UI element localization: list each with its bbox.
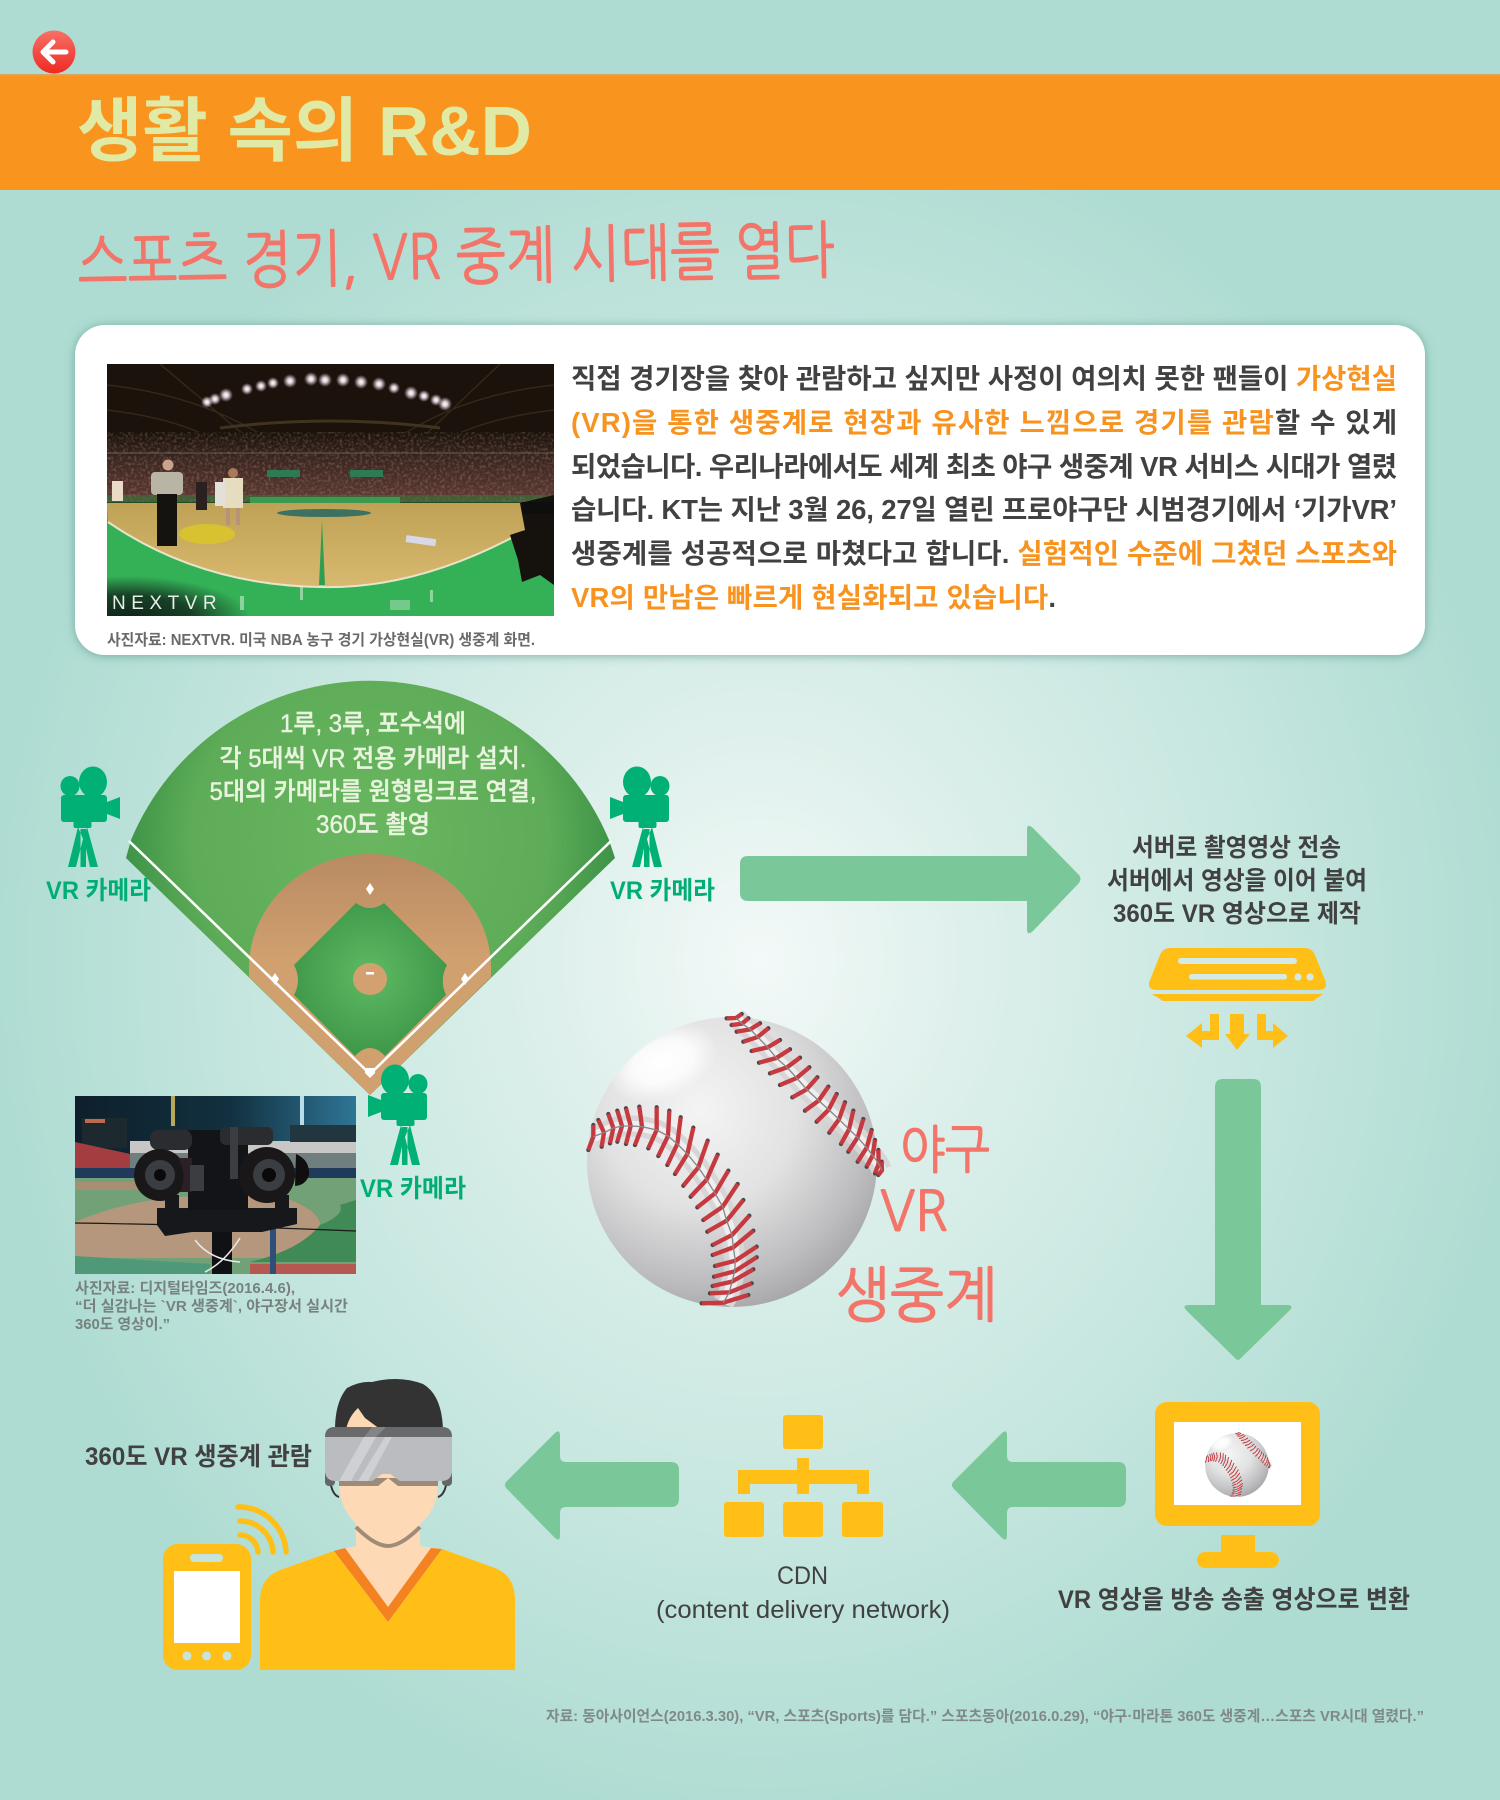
viewer label: 360도 VR 생중계 관람 (85, 1443, 312, 1471)
body text: 직접 경기장을 찾아 관람하고 싶지만 사정이 여의치 못한 팬들이 가상현실 (571, 363, 1397, 394)
field caption: 5대의 카메라를 원형링크로 연결, (210, 778, 536, 806)
baseball (587, 1007, 882, 1307)
right seam (727, 1014, 882, 1175)
headset (339, 1478, 438, 1486)
photographer (510, 495, 554, 585)
body text: (VR)을 통한 생중계로 현장과 유사한 느낌으로 경기를 관람할 수 있게 (571, 407, 1397, 438)
field caption: 각 5대씩 VR 전용 카메라 설치. (220, 745, 526, 773)
server text: 서버에서 영상을 이어 붙여 (1107, 867, 1367, 895)
handwritten label: 생중계 (836, 1265, 998, 1325)
label: VR camera bottom: VR 카메라 (360, 1175, 466, 1203)
photo caption: 사진자료: NEXTVR. 미국 NBA 농구 경기 가상현실(VR) 생중계 화면. (107, 631, 535, 649)
body text: 생중계를 성공적으로 마쳤다고 합니다. 실험적인 수준에 그쳤던 스포츠와 (571, 538, 1397, 569)
body text (571, 363, 1397, 613)
left seam (588, 1107, 757, 1303)
infield grass (294, 903, 447, 1056)
broadcast label: VR 영상을 방송 송출 영상으로 변환 (1058, 1586, 1410, 1614)
icon: monitor (1155, 1402, 1320, 1568)
label: VR camera right: VR 카메라 (610, 877, 715, 905)
wifi waves (238, 1507, 286, 1552)
arrow: down to broadcast (1184, 1079, 1292, 1360)
body text: VR의 만남은 빠르게 현실화되고 있습니다. (571, 582, 1056, 613)
icon: VR camera right (610, 766, 670, 867)
shirt (260, 1549, 515, 1670)
baseball field diagram (126, 681, 615, 1095)
server text: 360도 VR 영상으로 제작 (1113, 900, 1361, 928)
server text (1107, 834, 1367, 928)
lights (201, 372, 452, 411)
icon: server (1149, 948, 1326, 1050)
photo caption: 360도 영상이.” (75, 1316, 170, 1333)
icon: smartphone with wifi (163, 1507, 286, 1670)
bases (271, 883, 469, 1078)
icon: distribution arrows (1186, 1014, 1288, 1050)
arrow: to server (740, 826, 1080, 933)
handwritten label: VR (880, 1184, 948, 1240)
photo caption: 사진자료: 디지털타임즈(2016.4.6), (75, 1280, 295, 1297)
hair (335, 1379, 443, 1430)
title: 생활 속의 R&D (77, 92, 532, 170)
label: VR camera left: VR 카메라 (46, 877, 151, 905)
photo: NBA VR arena (107, 364, 554, 616)
pitcher's mound (353, 963, 387, 995)
CDN label: CDN (777, 1562, 828, 1590)
field caption: 360도 촬영 (316, 811, 430, 839)
neck and chest (334, 1500, 442, 1622)
panel: intro card (75, 325, 1425, 655)
camera rig (134, 1127, 309, 1274)
icon: person with VR headset (260, 1379, 515, 1670)
arrow: to viewer (505, 1431, 679, 1540)
field caption: 1루, 3루, 포수석에 (280, 710, 466, 738)
arrow: to CDN (952, 1431, 1126, 1540)
photo caption: “더 실감나는 `VR 생중계`, 야구장서 실시간 (75, 1298, 348, 1315)
photo: VR camera rig at stadium (75, 1096, 356, 1274)
icon: VR camera left (60, 766, 120, 867)
collar (334, 1548, 442, 1622)
referee and players (112, 460, 243, 546)
infield dirt (249, 854, 491, 1095)
subtitle: 스포츠 경기, VR 중계 시대를 열다 (77, 219, 835, 294)
body text: 습니다. KT는 지난 3월 26, 27일 열린 프로야구단 시범경기에서 ‘기가VR’ (571, 494, 1397, 525)
outfield grass (126, 681, 615, 1095)
server text: 서버로 촬영영상 전송 (1132, 834, 1341, 862)
photo caption (75, 1280, 348, 1333)
icon: VR camera bottom (368, 1064, 428, 1165)
title banner (0, 74, 1500, 190)
handwritten label (836, 1124, 998, 1325)
field caption (210, 710, 536, 839)
body text: 되었습니다. 우리나라에서도 세계 최초 야구 생중계 VR 서비스 시대가 열렸 (571, 451, 1397, 482)
icon: back button (32, 30, 76, 74)
jaw line (356, 1527, 420, 1546)
footer source: 자료: 동아사이언스(2016.3.30), “VR, 스포츠(Sports)를 담다.” 스포츠동아(2016.0.29), “야구·마라톤 360도 생중계…스포츠 VR시대 열렸다.” (546, 1708, 1424, 1725)
face (339, 1408, 438, 1535)
foul lines (129, 841, 611, 1074)
handwritten label: 야구 (900, 1124, 990, 1176)
CDN label (656, 1562, 950, 1624)
CDN label: (content delivery network) (656, 1596, 950, 1624)
mini baseball (1205, 1431, 1270, 1497)
icon: CDN network (724, 1415, 883, 1537)
logo text: NEXTVR (112, 593, 222, 614)
ear pieces (330, 1480, 447, 1497)
